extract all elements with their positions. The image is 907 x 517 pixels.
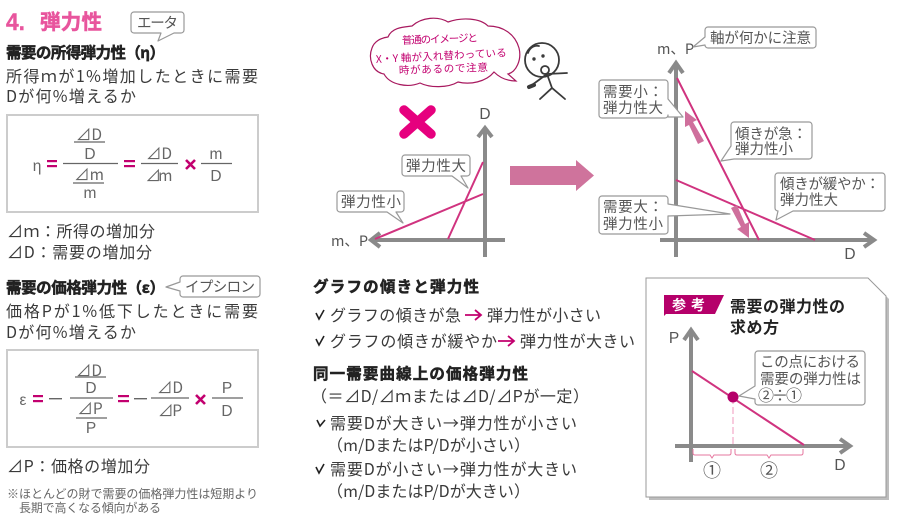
- text: price elasticity definition: Dが何%増えるか: [6, 319, 136, 343]
- chart: elasticity at a point: P: [669, 330, 679, 347]
- speech bubble: axis warning: 普通のイメージと: [402, 30, 478, 48]
- heading: panel title: 求め方: [730, 314, 779, 338]
- callout: high elasticity: 弾力性大: [406, 155, 466, 176]
- heading: price elasticity: 需要の価格弾力性（ε）: [6, 276, 165, 298]
- panel: income elasticity formula: m: [84, 185, 96, 202]
- chart: elasticity at a point: D: [834, 457, 846, 474]
- callout: small demand: 需要小：: [603, 81, 663, 102]
- text: slope list: 弾力性が大きい: [520, 328, 635, 352]
- text: slope list: グラフの傾きが緩やか: [330, 328, 497, 352]
- text: income elasticity definition: Dが何%増えるか: [6, 83, 136, 107]
- panel: price elasticity formula: ε: [20, 392, 27, 409]
- callout: eta reading: エータ: [137, 12, 178, 33]
- chart: reversed axes graph: [331, 106, 505, 257]
- callout: gentle slope: 弾力性大: [780, 189, 838, 210]
- callout: large demand: 需要大：: [603, 196, 663, 217]
- chart: elasticity at a point: ②: [760, 457, 778, 483]
- heading: income elasticity: 需要の所得弾力性（η）: [6, 41, 165, 63]
- panel: income elasticity formula: D: [210, 168, 222, 185]
- text: footnote: 長期で高くなる傾向がある: [19, 499, 161, 516]
- speech bubble: axis warning: 時があるので注意: [399, 60, 489, 78]
- panel: price elasticity formula: ⊿D: [157, 376, 183, 398]
- callout: small demand: [599, 80, 683, 118]
- text: same demand curve list: [311, 383, 589, 502]
- text: slope list: グラフの傾きが急: [330, 302, 461, 326]
- callout: large demand: 弾力性小: [603, 213, 664, 234]
- callout: steep slope: 傾きが急：: [735, 123, 807, 144]
- speech bubble: axis warning: [370, 18, 520, 87]
- panel: income elasticity formula: D: [84, 146, 96, 163]
- panel: price elasticity formula: ⊿P: [77, 397, 103, 419]
- arrow: falling price: [731, 205, 749, 238]
- panel: income elasticity formula: η: [33, 158, 41, 175]
- callout: point elasticity: ②÷①: [758, 382, 802, 406]
- text: same demand curve list: （＝⊿D/⊿ｍまたは⊿D/⊿Pが一定）: [311, 383, 589, 407]
- panel: income elasticity formula: ⊿D: [146, 142, 172, 164]
- callout: low elasticity: 弾力性小: [341, 191, 402, 212]
- callout: point elasticity: [739, 351, 865, 406]
- heading: panel title: [730, 293, 845, 338]
- title: 4.: [6, 9, 25, 36]
- text: same demand curve list: （m/DまたはP/Dが大きい）: [327, 478, 530, 502]
- panel: price elasticity formula: D: [221, 403, 233, 420]
- callout: low elasticity: [337, 191, 404, 223]
- title: 弾力性: [40, 5, 102, 35]
- callout: point elasticity: 需要の弾力性は: [760, 368, 861, 389]
- text: price elasticity definition: 価格Pが1%低下したときに需要: [6, 298, 258, 322]
- text: same demand curve list: 需要Dが小さい→弾力性が大きい: [330, 456, 577, 480]
- text: footnote: [7, 485, 258, 516]
- panel: price elasticity formula: [7, 350, 258, 447]
- text: income elasticity definition: [6, 63, 258, 107]
- text: slope list: 弾力性が小さい: [487, 302, 601, 326]
- text: income variable definitions: ⊿D：需要の増加分: [7, 239, 152, 263]
- panel: income elasticity formula: [7, 115, 258, 212]
- speech bubble: axis warning: X・Y 軸が入れ替わっている: [375, 45, 507, 67]
- text: price elasticity definition: [6, 298, 258, 343]
- chart: elasticity at a point: ①: [703, 457, 721, 483]
- panel: price elasticity formula: D: [85, 380, 97, 397]
- heading: same demand curve: 同一需要曲線上の価格弾力性: [313, 362, 528, 384]
- panel: how to calculate elasticity: [646, 278, 889, 500]
- chart: demand slopes graph: [599, 27, 885, 263]
- panel: income elasticity formula: ⊿D: [76, 123, 102, 145]
- text: income variable definitions: [7, 218, 155, 263]
- heading: panel title: 需要の弾力性の: [730, 293, 845, 317]
- callout: gentle slope: [775, 173, 885, 220]
- text: slope list: [316, 302, 635, 352]
- callout: gentle slope: 傾きが緩やか：: [780, 173, 880, 194]
- panel: income elasticity formula: ⊿m: [146, 164, 172, 186]
- text: same demand curve list: （m/DまたはP/Dが小さい）: [327, 432, 530, 456]
- callout: large demand: [599, 196, 730, 234]
- panel: price elasticity formula: P: [86, 420, 96, 437]
- arrow: rising price: [685, 111, 704, 144]
- badge: reference: [664, 295, 724, 316]
- chart: demand slopes graph: m、P: [657, 38, 694, 59]
- chart: reversed axes graph: D: [479, 106, 491, 123]
- chart: demand slopes graph: D: [844, 246, 856, 263]
- chart: reversed axes graph: m、P: [331, 230, 368, 251]
- callout: eta reading: [131, 12, 184, 41]
- text: income elasticity definition: 所得ｍが1%増加したときに需要: [6, 63, 258, 87]
- chart: elasticity at a point: [669, 330, 865, 483]
- callout: epsilon reading: イプシロン: [185, 276, 255, 297]
- text: price variable definition: ⊿P：価格の増加分: [7, 453, 150, 477]
- text: same demand curve list: 需要Dが大きい→弾力性が小さい: [330, 410, 577, 434]
- badge: reference: 参考: [672, 295, 705, 315]
- text: income variable definitions: ⊿ｍ：所得の増加分: [7, 218, 155, 242]
- icon: stick figure thinking: [525, 43, 567, 99]
- panel: price elasticity formula: ⊿D: [76, 359, 102, 381]
- heading: slope and elasticity: グラフの傾きと弾力性: [313, 275, 479, 297]
- callout: check the axis: 軸が何かに注意: [710, 27, 811, 48]
- callout: steep slope: 弾力性小: [735, 138, 794, 159]
- title: [6, 5, 102, 36]
- panel: income elasticity formula: ⊿m: [74, 163, 104, 185]
- icon: cross mark: [404, 110, 431, 134]
- text: footnote: ※ほとんどの財で需要の価格弾力性は短期より: [7, 485, 258, 502]
- arrow: to corrected graph: [510, 160, 594, 191]
- callout: small demand: 弾力性大: [603, 97, 663, 118]
- panel: income elasticity formula: m: [210, 146, 222, 163]
- panel: price elasticity formula: ⊿P: [158, 399, 182, 421]
- callout: steep slope: [721, 122, 812, 161]
- callout: point elasticity: この点における: [760, 351, 860, 372]
- callout: high elasticity: [402, 155, 470, 188]
- panel: price elasticity formula: P: [222, 380, 232, 397]
